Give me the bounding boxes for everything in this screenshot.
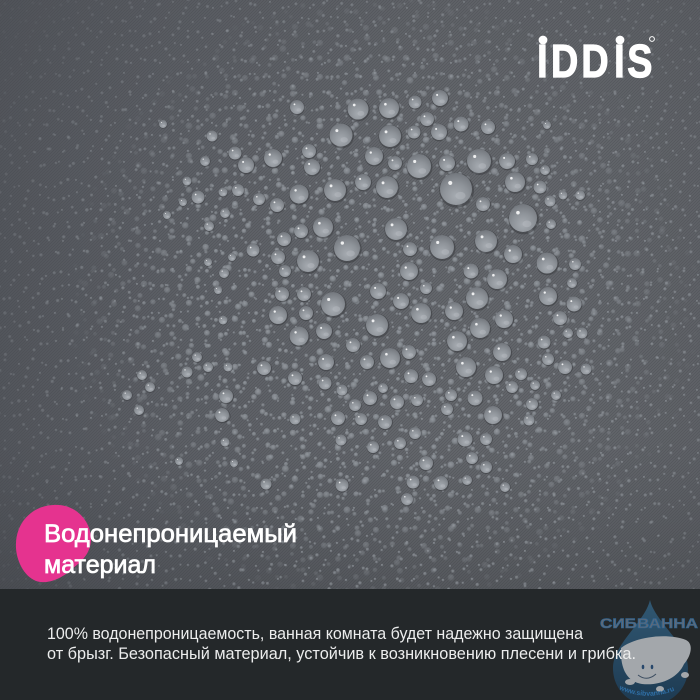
large water droplets — [122, 90, 592, 506]
watermark: Sibvanna logo: www.sibvanna.ru — [620, 686, 674, 696]
watermark: Sibvanna logo — [600, 600, 698, 700]
body text: 100% водонепроницаемость, ванная комната будет надежно защищена — [47, 625, 584, 643]
title: материал — [44, 551, 156, 579]
body text: от брызг. Безопасный материал, устойчив к возникновению плесени и грибка. — [47, 645, 636, 663]
pink accent circle — [16, 505, 91, 582]
title — [44, 520, 297, 579]
watermark: Sibvanna logo: СИБВАННА — [600, 616, 698, 631]
bottom dark panel — [0, 589, 700, 700]
logo: IDDIS: IDDIS — [537, 35, 652, 87]
body text — [47, 625, 636, 663]
title: Водонепроницаемый — [44, 520, 297, 548]
